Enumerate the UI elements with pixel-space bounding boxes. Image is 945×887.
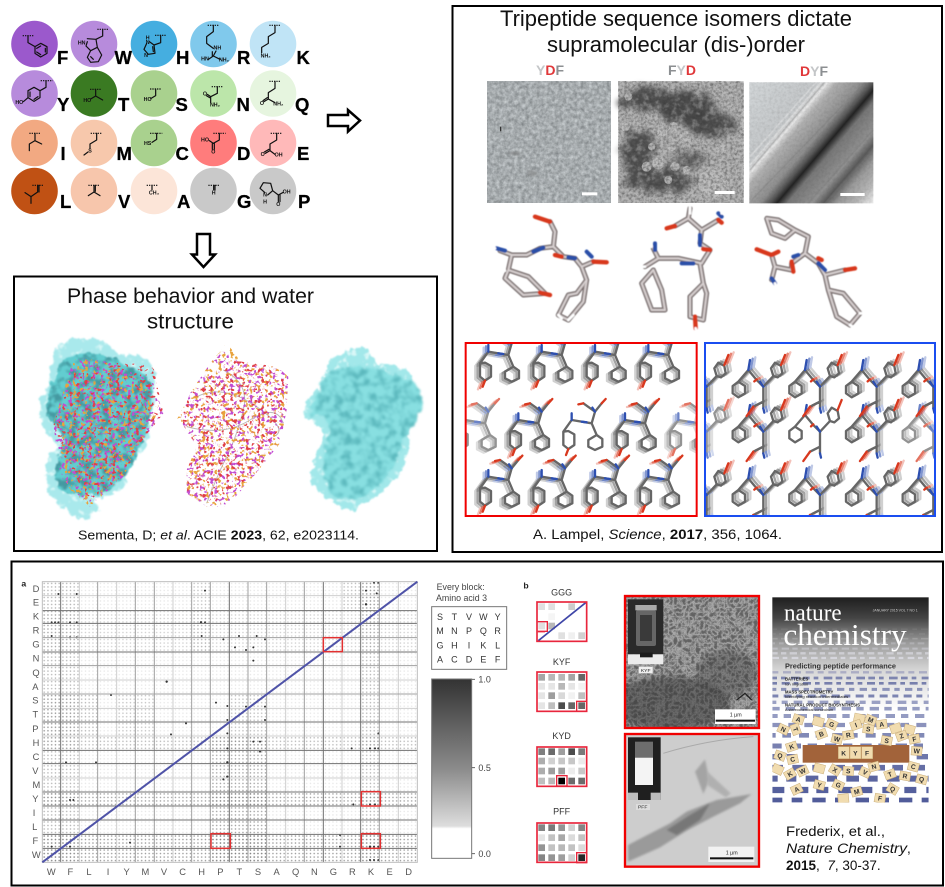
- citation: Sementa, D; et al. ACIE 2023, 62, e2023114.: [78, 528, 359, 542]
- side chain skeletal structures: CH₃: [149, 190, 160, 196]
- side chain skeletal structures: OH: [275, 152, 283, 158]
- y axis labels: S: [32, 696, 38, 706]
- heading: structure: [147, 310, 234, 334]
- x axis labels: C: [179, 867, 186, 877]
- thumbnail: PFF: PFF: [553, 806, 571, 816]
- legend: amino acid 3 key: C: [451, 655, 458, 665]
- cover headlines: [785, 661, 896, 712]
- x axis labels: R: [349, 867, 356, 877]
- scattered letter tiles: N: [871, 763, 878, 771]
- citation: , 7, 30-37.: [816, 858, 881, 873]
- y axis labels: G: [32, 640, 40, 650]
- packing: blue frame: [704, 342, 936, 517]
- y axis labels: M: [32, 780, 40, 790]
- crystal packing panels: [464, 342, 936, 517]
- scattered letter tiles: C: [910, 763, 917, 772]
- legend: amino acid 3 key: H: [451, 640, 458, 650]
- one-letter amino acid codes: C: [176, 143, 189, 164]
- sequence labels: DYF: [800, 63, 828, 79]
- y axis labels: D: [33, 584, 40, 594]
- cover masthead: chemistry: [783, 618, 907, 652]
- scattered letter tiles: N: [779, 726, 787, 734]
- panel border: [14, 276, 437, 551]
- cover headlines: Identifying reaction intermediates: [785, 694, 848, 699]
- legend: amino acid 3 key: P: [466, 626, 472, 636]
- x axis labels: N: [311, 867, 318, 877]
- scattered letter tiles: R: [902, 773, 908, 781]
- journal cover: Nature Chemistry: [771, 597, 929, 804]
- scattered letter tiles: A: [879, 721, 885, 729]
- wooden letter rack: [803, 745, 909, 763]
- y axis labels: I: [33, 808, 35, 818]
- scattered letter tiles: Y: [816, 782, 823, 790]
- thumbnail: GGG: [537, 588, 587, 641]
- KYF tiles on rack: Y: [853, 750, 858, 757]
- side chain skeletal structures: S: [88, 149, 92, 155]
- one-letter amino acid codes: W: [114, 47, 132, 68]
- one-letter amino acid codes: E: [297, 143, 309, 164]
- scattered letter tiles: C: [790, 756, 796, 764]
- side chain skeletal structures: NH: [213, 46, 221, 52]
- scattered letter tiles: S: [866, 726, 871, 734]
- cover headlines: NATURAL PRODUCT BIOSYNTHESIS: [785, 702, 860, 707]
- legend: amino acid 3 key: S: [437, 612, 443, 622]
- one-letter amino acid codes: K: [296, 47, 310, 68]
- panel: tripeptide aggregation screen: [12, 562, 943, 886]
- scattered letter tiles: G: [827, 721, 835, 729]
- sequence labels: YDF: [536, 62, 564, 78]
- x axis labels: V: [161, 867, 168, 877]
- thumbnail: KYF: KYF: [553, 657, 571, 667]
- diagonal line: [42, 582, 417, 862]
- micrograph: PFF crystals: [625, 734, 759, 867]
- one-letter amino acid codes: M: [116, 143, 132, 164]
- x axis labels: Q: [292, 867, 299, 877]
- legend: amino acid 3 key: Amino acid 3: [436, 593, 487, 603]
- legend: amino acid 3 key: M: [436, 626, 444, 636]
- scattered letter tiles: Q: [776, 752, 783, 761]
- side chain skeletal structures: HN: [201, 57, 209, 63]
- cover headlines: MASS SPECTROMETRY: [785, 690, 834, 695]
- arrow: right: [328, 110, 360, 132]
- thumbnail: KYD: KYD: [552, 731, 571, 741]
- legend: amino acid 3 key: N: [451, 626, 458, 636]
- legend: amino acid 3 key: V: [466, 612, 472, 622]
- scattered letter tiles: S: [884, 738, 890, 745]
- colorbar legend: 0.0: [478, 849, 491, 859]
- sequence labels: [536, 62, 828, 79]
- x axis labels: E: [387, 867, 393, 877]
- y axis labels: K: [33, 612, 40, 622]
- cover headlines: A stereochemical conundrum: [785, 707, 834, 712]
- micrograph: PFF crystals: PFF: [638, 805, 647, 811]
- legend: amino acid 3 key: W: [479, 612, 488, 622]
- snapshot: peptide with water: [39, 337, 163, 519]
- side chain skeletal structures: N: [146, 40, 150, 46]
- scattered letter tiles: T: [791, 727, 799, 733]
- scattered letter tiles: T: [887, 771, 893, 779]
- panel: phase behavior and water structure: [14, 276, 437, 551]
- side chain skeletal structures: HO: [15, 100, 23, 106]
- colorbar legend: 0.5: [478, 763, 491, 773]
- scattered letter tiles: [771, 713, 928, 804]
- legend: amino acid 3 key: K: [480, 640, 486, 650]
- y axis labels: L: [32, 822, 37, 832]
- x axis labels: K: [368, 867, 375, 877]
- x axis labels: G: [330, 867, 337, 877]
- scattered letter tiles: Q: [888, 785, 896, 794]
- one-letter amino acid codes: Q: [295, 94, 309, 115]
- scattered letter tiles: Q: [918, 776, 925, 784]
- legend: amino acid 3 key: T: [452, 612, 458, 622]
- one-letter amino acid codes: G: [237, 191, 251, 212]
- side chain skeletal structures: N: [144, 53, 148, 59]
- y axis labels: R: [33, 626, 40, 636]
- scattered letter tiles: K: [787, 770, 794, 779]
- side chain skeletal structures: O: [261, 152, 265, 158]
- side chain skeletal structures: HS: [144, 141, 152, 147]
- scattered letter tiles: I: [854, 722, 858, 729]
- citation: A. Lampel, Science , 2017, 356, 1064.: [533, 527, 782, 542]
- y axis labels: [32, 584, 41, 860]
- scattered letter tiles: G: [834, 781, 842, 790]
- legend: amino acid 3 key: A: [437, 655, 443, 665]
- molecular simulation snapshots: [39, 337, 423, 519]
- x axis labels: L: [86, 867, 92, 877]
- one-letter amino acid codes: S: [176, 94, 188, 115]
- heatmap: aggregation propensity matrix: [21, 579, 417, 877]
- y axis labels: A: [32, 682, 39, 692]
- legend: amino acid 3 key: [432, 582, 507, 669]
- citation: 2015: [786, 858, 817, 873]
- legend: amino acid 3 key: R: [494, 626, 501, 636]
- y axis labels: T: [32, 710, 38, 720]
- electron micrographs and stick models: [487, 81, 873, 332]
- micrograph: PFF crystals: 1 µm: [726, 850, 738, 856]
- micrograph: KYF fibres: 1 µm: [730, 713, 742, 719]
- snapshot: peptide only: [177, 343, 288, 507]
- side chain skeletal structures: O: [260, 101, 264, 107]
- one-letter amino acid codes: L: [60, 191, 71, 212]
- y axis labels: V: [32, 766, 39, 776]
- scattered letter tiles: W: [913, 748, 921, 756]
- x axis labels: Y: [124, 867, 131, 877]
- legend and sequence thumbnails: [432, 580, 587, 863]
- legend: amino acid 3 key: I: [468, 640, 470, 650]
- scattered letter tiles: B: [818, 731, 825, 739]
- x axis labels: D: [405, 867, 412, 877]
- micrograph: KYF fibres: KYF: [641, 668, 651, 674]
- one-letter amino acid codes: [57, 47, 310, 212]
- y axis labels: W: [32, 850, 41, 860]
- KYF tiles on rack: F: [865, 750, 869, 757]
- citation: ,: [907, 841, 911, 856]
- x axis labels: A: [274, 867, 281, 877]
- sequence labels: FYD: [668, 62, 696, 78]
- heading: supramolecular (dis-)order: [547, 32, 805, 57]
- one-letter amino acid codes: N: [236, 94, 250, 115]
- side chain skeletal structures: N: [263, 193, 267, 199]
- legend: amino acid 3 key: Y: [495, 612, 501, 622]
- snapshot: water only: [305, 348, 423, 510]
- stick model: FYD: [638, 207, 728, 332]
- y axis labels: Q: [32, 668, 40, 678]
- one-letter amino acid codes: H: [176, 47, 189, 68]
- KYF tiles on rack: K: [841, 750, 846, 757]
- figure part label b: b: [523, 580, 529, 590]
- scattered letter tiles: F: [877, 795, 882, 803]
- thumbnail: KYD: [537, 731, 587, 786]
- legend: amino acid 3 key: D: [466, 655, 473, 665]
- colorbar legend: 1.0: [478, 674, 491, 684]
- side chain skeletal structures: H: [212, 191, 216, 197]
- side chain skeletal structures: HO: [144, 97, 152, 103]
- y axis labels: C: [33, 752, 40, 762]
- KYF tiles on rack: [838, 747, 873, 759]
- scattered letter tiles: A: [793, 786, 801, 794]
- side chain skeletal structures: NH₂: [219, 57, 230, 63]
- stick model: DYF: [755, 215, 862, 328]
- heading: Tripeptide sequence isomers dictate: [500, 6, 852, 31]
- side chain skeletal structures: HO: [201, 138, 209, 144]
- micrograph: FYD: [618, 81, 744, 203]
- y axis labels: H: [33, 738, 39, 748]
- one-letter amino acid codes: D: [237, 143, 250, 164]
- y axis labels: E: [33, 598, 39, 608]
- amino acid circles: [11, 21, 296, 214]
- scattered letter tiles: X: [831, 767, 839, 775]
- figure part label a: a: [21, 579, 26, 589]
- legend: amino acid 3 key: G: [436, 640, 443, 650]
- scattered letter tiles: F: [912, 736, 917, 744]
- thumbnail: GGG: GGG: [551, 588, 572, 598]
- legend: amino acid 3 key: F: [495, 655, 501, 665]
- panel: tripeptide sequence isomers: [452, 6, 945, 552]
- one-letter amino acid codes: P: [298, 191, 310, 212]
- thumbnail: PFF: [537, 806, 587, 863]
- x axis labels: M: [141, 867, 149, 877]
- scattered letter tiles: M: [853, 788, 861, 797]
- cover headlines: Ion migration: [785, 681, 808, 686]
- y axis labels: N: [33, 654, 39, 664]
- side chain skeletal structures: O: [276, 202, 280, 208]
- amino acid side chain chart: [11, 21, 310, 214]
- packing: red frame: [464, 342, 698, 517]
- scattered letter tiles: Z: [899, 733, 905, 741]
- side chain skeletal structures: O: [203, 91, 207, 97]
- panel border: [12, 562, 943, 886]
- legend: amino acid 3 key: Every block:: [437, 582, 485, 592]
- cover square grid: [772, 629, 929, 800]
- one-letter amino acid codes: A: [177, 191, 190, 212]
- thumbnail: KYF: [537, 657, 587, 711]
- legend: amino acid 3 key: L: [495, 640, 500, 650]
- scattered letter tiles: R: [845, 732, 852, 740]
- micrograph: KYF fibres: [610, 596, 759, 730]
- micrograph: DYF: [749, 82, 873, 203]
- side chain skeletal structures: H: [263, 199, 267, 205]
- side chain skeletal structures: HN: [78, 41, 86, 47]
- heatmap dots: [42, 582, 417, 862]
- side chain skeletal structures: O: [211, 149, 215, 155]
- one-letter amino acid codes: F: [57, 47, 68, 68]
- x axis labels: [47, 867, 412, 877]
- arrow: down: [192, 234, 215, 267]
- y axis labels: P: [32, 724, 38, 734]
- one-letter amino acid codes: I: [60, 143, 66, 164]
- y axis labels: Y: [32, 794, 39, 804]
- legend: amino acid 3 key: E: [480, 655, 486, 665]
- side chain skeletal structures: OH: [283, 189, 291, 195]
- side chain skeletal structures: NH₂: [273, 101, 284, 107]
- colorbar legend: [432, 674, 491, 859]
- scattered letter tiles: V: [861, 769, 869, 777]
- one-letter amino acid codes: Y: [57, 94, 70, 115]
- scattered letter tiles: A: [795, 716, 802, 724]
- cover masthead: nature: [784, 601, 842, 627]
- one-letter amino acid codes: R: [237, 47, 250, 68]
- y axis labels: F: [32, 836, 38, 846]
- cover masthead: [783, 601, 907, 652]
- scattered letter tiles: S: [846, 768, 851, 776]
- x axis labels: S: [255, 867, 261, 877]
- scattered letter tiles: W: [833, 736, 841, 744]
- x axis labels: I: [107, 867, 109, 877]
- stick model: YDF: [490, 217, 607, 320]
- x axis labels: H: [198, 867, 205, 877]
- cover headlines: Predicting peptide performance: [785, 661, 896, 670]
- x axis labels: W: [47, 867, 56, 877]
- side chain skeletal structures: H: [146, 36, 150, 42]
- side chain skeletal structures: [15, 25, 291, 208]
- side chain skeletal structures: HO: [83, 98, 91, 104]
- x axis labels: F: [67, 867, 73, 877]
- x axis labels: T: [236, 867, 242, 877]
- side chain skeletal structures: NH₂: [210, 103, 221, 109]
- cover headlines: BATTERIES: [785, 677, 808, 682]
- scattered letter tiles: K: [789, 743, 795, 752]
- cover date line: JANUARY 2015 VOL 7 NO 1: [873, 608, 918, 612]
- heading: Phase behavior and water: [67, 285, 314, 308]
- side chain skeletal structures: NH₂: [261, 54, 271, 60]
- citation: Nature Chemistry: [786, 841, 908, 856]
- scattered letter tiles: W: [799, 767, 808, 776]
- x axis labels: P: [217, 867, 223, 877]
- micrograph: YDF: [487, 81, 611, 203]
- micrographs and journal cover: [610, 596, 929, 867]
- legend: amino acid 3 key: Q: [480, 626, 487, 636]
- highlighted sequence boxes: [211, 638, 380, 848]
- scattered letter tiles: M: [866, 716, 875, 725]
- one-letter amino acid codes: T: [118, 94, 130, 115]
- panel border: [452, 6, 942, 552]
- one-letter amino acid codes: V: [118, 191, 131, 212]
- citation: Frederix, et al.,: [786, 824, 885, 839]
